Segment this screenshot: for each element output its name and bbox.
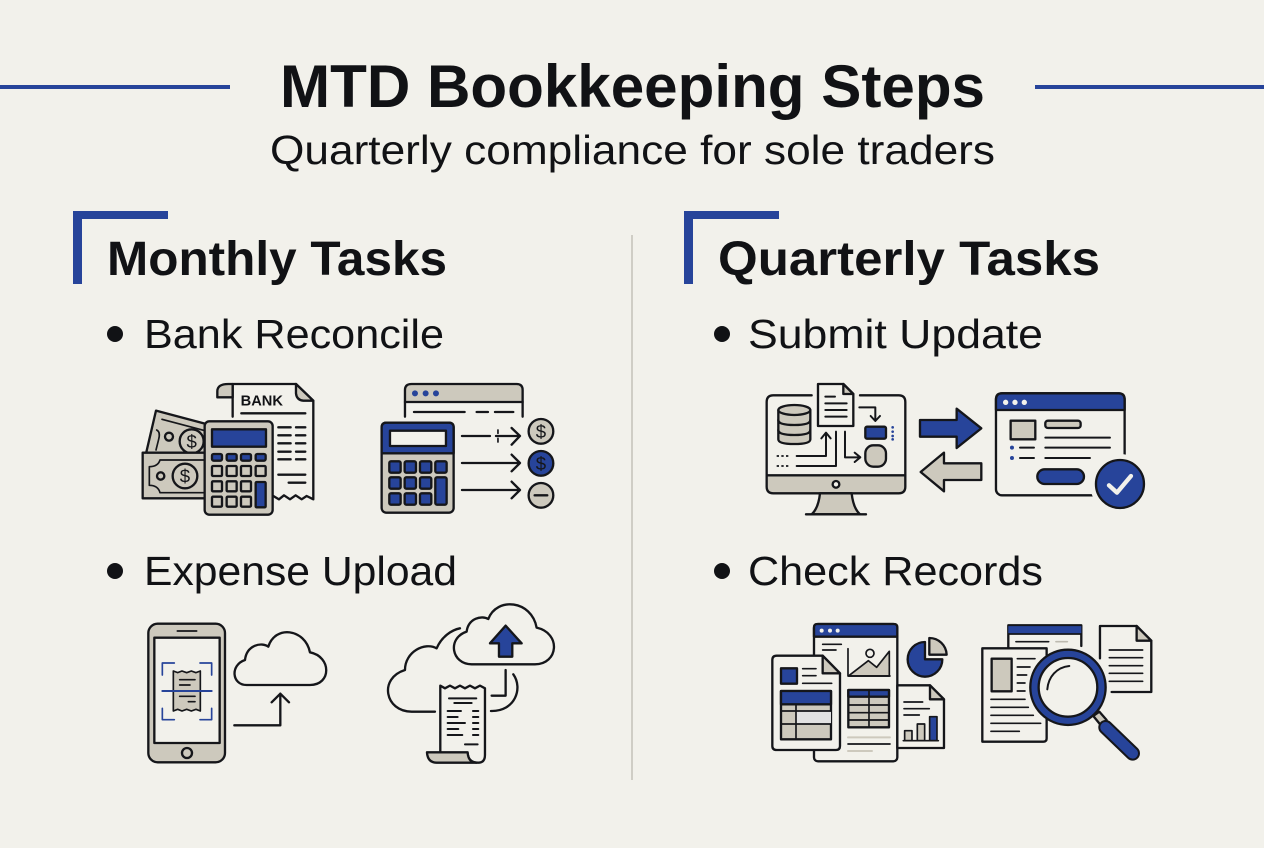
column divider [631, 235, 633, 780]
bullet: submit update [714, 326, 730, 342]
panel: monthly tasks [73, 211, 554, 763]
bullet: check records [714, 563, 730, 579]
icon: receipt uploaded to overlapping clouds [388, 604, 554, 763]
icon: calculator reconciling to currency: $ [536, 421, 547, 442]
task label: bank reconcile: Bank Reconcile [144, 311, 444, 357]
icon: desktop data sync to portal with confirmation [767, 384, 1150, 514]
task label: expense upload: Expense Upload [144, 548, 457, 594]
icon: phone receipt scan to cloud [148, 624, 326, 762]
task label: submit update: Submit Update [748, 311, 1043, 357]
section bracket: monthly [73, 211, 168, 284]
header rule right [1035, 85, 1264, 89]
header rule left [0, 85, 230, 89]
section bracket: quarterly [684, 211, 779, 284]
heading: quarterly tasks: Quarterly Tasks [718, 233, 1100, 286]
icon: magnifier over documents [982, 625, 1151, 753]
icon: bank statement, cash and calculator [143, 384, 313, 515]
heading: monthly tasks: Monthly Tasks [107, 233, 447, 286]
icon: reports, charts and tables [772, 624, 947, 761]
title: MTD Bookkeeping Steps [280, 53, 985, 120]
icon: calculator reconciling to currency: $ [536, 453, 547, 474]
panel: quarterly tasks [684, 211, 1151, 761]
icon: calculator reconciling to currency [382, 384, 553, 513]
bullet: bank reconcile [107, 326, 123, 342]
subtitle: Quarterly compliance for sole traders [270, 127, 995, 173]
icon: bank statement, cash and calculator: BANK [241, 394, 283, 410]
icon: bank statement, cash and calculator: $ [186, 431, 197, 452]
icon: bank statement, cash and calculator: $ [180, 466, 191, 487]
task label: check records: Check Records [748, 548, 1043, 594]
bullet: expense upload [107, 563, 123, 579]
